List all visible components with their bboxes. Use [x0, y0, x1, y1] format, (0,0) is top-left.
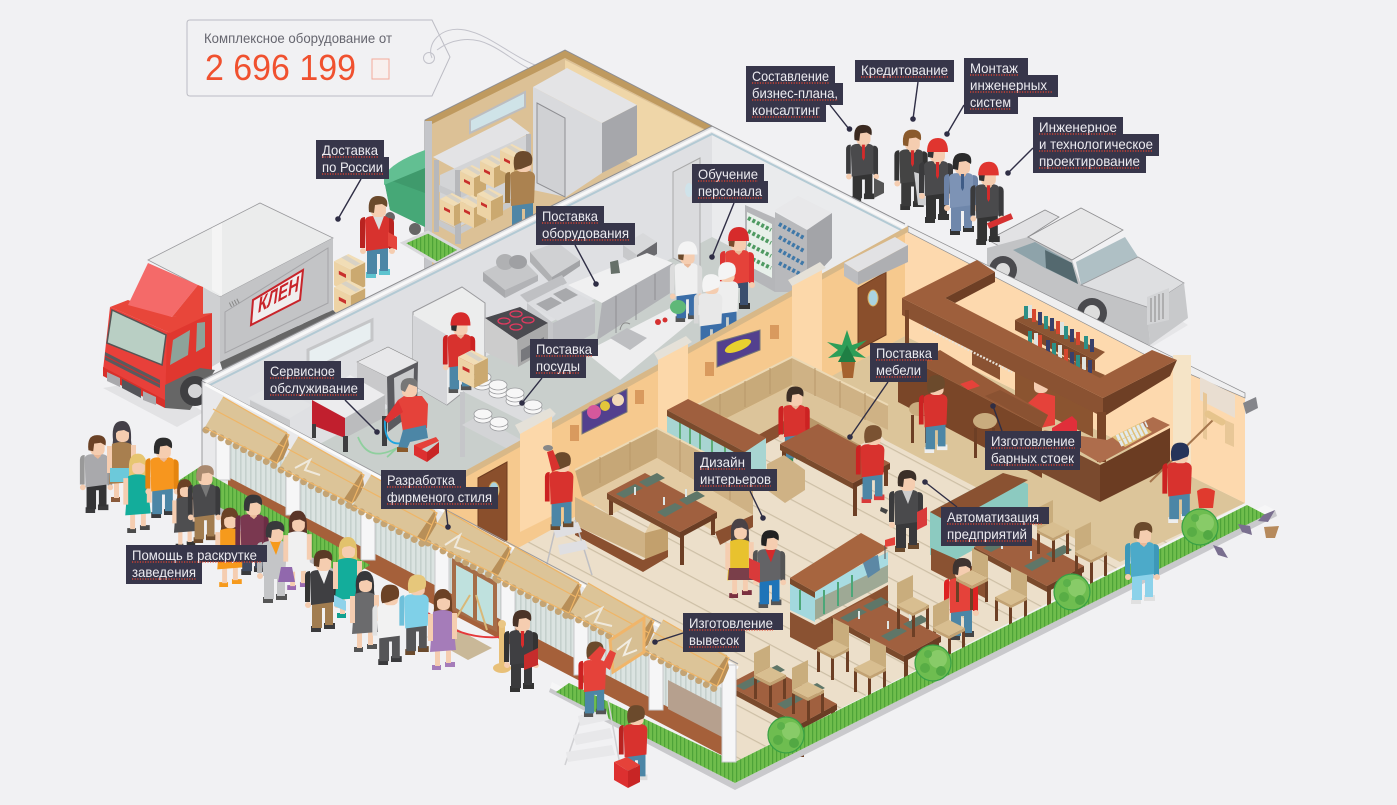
kitchen right wall	[712, 126, 905, 336]
label: Автоматизация предприятий	[922, 479, 1049, 546]
table front	[831, 597, 941, 689]
partition wall	[423, 228, 905, 600]
bar canopy	[902, 260, 1177, 462]
visitor 10	[283, 511, 312, 590]
sign board	[610, 618, 644, 672]
label: Обучение персонала	[692, 164, 768, 260]
hoses	[385, 420, 413, 443]
label: Монтаж инженерных систем: инженерных	[970, 77, 1047, 93]
blue suit man	[944, 150, 979, 235]
grass border front	[549, 505, 1277, 790]
door one	[478, 462, 507, 555]
label: Сервисное обслуживание: Сервисное	[270, 363, 335, 379]
truck shadow	[103, 380, 204, 427]
rat figurine	[610, 260, 620, 274]
kneeling repairman	[384, 378, 428, 452]
bar worker	[919, 375, 947, 453]
window	[308, 320, 372, 372]
consultant	[846, 122, 879, 202]
bushes	[768, 509, 1218, 753]
visitor 7	[215, 508, 244, 587]
salad	[670, 300, 686, 314]
label: Составление бизнес-плана, консалтинг	[746, 66, 852, 132]
label: Обучение персонала: персонала	[698, 183, 762, 199]
label: Сервисное обслуживание: обслуживание	[270, 380, 358, 396]
label: Автоматизация предприятий: Автоматизация	[947, 509, 1039, 525]
label: Инженерное и технологическое проектирование: Инженерное	[1039, 119, 1117, 135]
visitor 11	[305, 547, 340, 632]
visitor 12	[333, 537, 362, 618]
trainee chef two	[710, 262, 738, 340]
facade rim	[202, 381, 738, 664]
picture: car	[717, 330, 760, 367]
label: Монтаж инженерных систем: систем	[970, 94, 1011, 110]
interior window	[668, 680, 722, 737]
label: Поставка посуды: Поставка	[536, 341, 592, 357]
label: Кредитование	[855, 60, 954, 122]
passer-by	[1125, 519, 1160, 604]
lower sofa	[575, 428, 753, 572]
air conditioner	[844, 237, 908, 272]
label: Составление бизнес-плана, консалтинг: Составление	[752, 68, 829, 84]
label: Дизайн интерьеров	[694, 452, 777, 521]
label: Монтаж инженерных систем: Монтаж	[970, 60, 1019, 76]
designer couple	[725, 519, 786, 608]
label: Поставка оборудования: Поставка	[542, 208, 598, 224]
chair behind server	[933, 598, 965, 660]
woman in yellow	[725, 519, 754, 598]
hanging glasses	[925, 325, 1013, 370]
painter	[1162, 443, 1192, 523]
bucket	[1197, 488, 1215, 508]
dining hall	[420, 226, 1258, 762]
lamp installer on ladder	[543, 445, 592, 575]
delivery boxes	[334, 254, 365, 320]
bottle shelf and back bar	[972, 305, 1105, 437]
facade	[202, 381, 738, 762]
window	[470, 92, 525, 133]
tool box	[414, 437, 439, 462]
label: Изготовление вывесок	[652, 613, 783, 652]
label: Разработка фирменого стиля: фирменого стиля	[387, 489, 492, 505]
bar zone floor	[825, 336, 1245, 562]
chairs front	[817, 575, 929, 700]
manager with tablet	[880, 467, 927, 552]
car	[987, 208, 1188, 348]
menu folder	[524, 648, 538, 670]
entrance door	[452, 558, 497, 632]
label: Доставка по России: по России	[322, 159, 383, 175]
visitor 1	[80, 432, 113, 513]
visitor 4	[145, 435, 180, 518]
label: Доставка по России	[316, 140, 389, 222]
plan sheet	[914, 172, 936, 206]
long counter	[568, 253, 673, 303]
table right	[974, 527, 1084, 619]
visitor 9	[257, 518, 292, 603]
label: Изготовление барных стоек: Изготовление	[991, 433, 1075, 449]
trainee chef one	[670, 241, 703, 322]
crowd queue	[80, 421, 539, 692]
doorman	[504, 607, 539, 692]
hoods	[483, 255, 538, 290]
label: Поставка оборудования	[536, 206, 635, 287]
dumpster	[384, 150, 425, 235]
bartender	[1028, 375, 1055, 428]
label: Обучение персонала: Обучение	[698, 166, 758, 182]
specialists group	[846, 122, 1012, 245]
truck	[103, 203, 340, 427]
tag caption: Комплексное оборудование от	[204, 30, 393, 46]
visitor 3	[123, 454, 152, 533]
label: Составление бизнес-плана, консалтинг: консалтинг	[752, 102, 820, 118]
engineer two	[970, 162, 1005, 245]
visitor 14	[372, 585, 402, 665]
label: Разработка фирменого стиля: Разработка	[387, 472, 455, 488]
bar counter	[898, 350, 1048, 478]
mover table	[780, 424, 890, 516]
delivery man	[360, 193, 395, 278]
label: Помощь в раскрутке заведения	[126, 545, 267, 584]
kitchen back wall	[202, 126, 712, 506]
logo	[251, 270, 303, 325]
plant	[827, 330, 867, 378]
label: Помощь в раскрутке заведения: заведения	[132, 564, 196, 580]
aquarium partition	[667, 399, 766, 490]
stools	[909, 402, 997, 458]
plates shelf	[460, 378, 555, 430]
table one	[607, 473, 717, 565]
label: Изготовление барных стоек: барных стоек	[991, 450, 1075, 466]
tag loop	[424, 52, 434, 64]
rear wheels	[276, 323, 304, 351]
chairs bottom	[754, 645, 824, 722]
picture: fireworks	[582, 389, 627, 434]
kitchen	[202, 126, 905, 560]
shelving	[433, 118, 530, 170]
logo: КЛЕН	[258, 271, 299, 318]
storekeeper	[505, 151, 535, 233]
sink counter	[585, 298, 705, 380]
label: Инженерное и технологическое проектирование	[1005, 117, 1159, 176]
storage room	[425, 50, 712, 270]
server with chair	[944, 555, 979, 640]
man with scarf	[753, 527, 786, 608]
side table	[248, 385, 312, 418]
fryer panel	[520, 275, 567, 303]
chairs right	[995, 500, 1107, 629]
brown plinth	[228, 477, 735, 762]
label: Сервисное обслуживание	[264, 361, 380, 435]
label: Поставка посуды	[519, 339, 598, 406]
rolled drawing	[988, 216, 1012, 226]
grass tray	[403, 232, 460, 263]
label: Дизайн интерьеров: Дизайн	[700, 454, 745, 470]
price tag	[187, 20, 535, 96]
microwave	[623, 233, 657, 255]
stored boxes	[460, 165, 486, 198]
label: Изготовление вывесок: Изготовление	[689, 615, 773, 631]
label: Кредитование: Кредитование	[861, 62, 948, 78]
display windows	[225, 425, 735, 745]
visitor 2	[107, 421, 136, 502]
paint patch and roller	[1150, 377, 1235, 482]
wall lamps	[570, 325, 779, 441]
seated man behind table	[778, 384, 811, 462]
visitor 13	[350, 571, 379, 652]
sign installer	[565, 642, 620, 765]
cab	[103, 307, 170, 408]
left grass strip	[172, 468, 370, 584]
flag	[884, 545, 886, 559]
rope	[428, 613, 500, 637]
fridge two	[775, 196, 832, 230]
rim	[908, 226, 1245, 398]
engineer one	[919, 138, 954, 223]
mat	[427, 625, 492, 660]
table bottom	[727, 665, 837, 757]
columns	[216, 425, 736, 762]
head chef	[720, 227, 755, 312]
tag string	[431, 29, 535, 68]
right aquarium	[930, 473, 1028, 598]
hall floor	[420, 336, 1245, 762]
red oven	[312, 375, 385, 418]
visitor 15	[399, 575, 429, 655]
stove	[485, 307, 548, 340]
label: Помощь в раскрутке заведения: Помощь в раскрутке	[132, 547, 257, 563]
door opening	[413, 287, 485, 405]
back wall	[905, 228, 1245, 503]
partition top trim	[425, 226, 908, 498]
label: Поставка мебели: мебели	[876, 362, 921, 378]
price: 2 696 199	[205, 47, 356, 88]
tool box on bar	[1052, 416, 1077, 442]
label: Изготовление барных стоек	[985, 403, 1081, 470]
label: Поставка посуды: посуды	[536, 358, 580, 374]
bar cabinet end	[1020, 417, 1170, 502]
label: Составление бизнес-плана, консалтинг: бизнес-плана,	[752, 85, 838, 101]
cargo box	[148, 203, 333, 297]
upper sofa	[697, 357, 888, 455]
awnings	[205, 397, 729, 689]
label: Поставка мебели	[847, 343, 938, 440]
tall combi oven	[357, 347, 418, 377]
label: Доставка по России: Доставка	[322, 142, 378, 158]
red folder	[749, 558, 760, 583]
pilasters	[520, 268, 822, 532]
briefcase	[874, 178, 884, 198]
kitchen floor	[202, 237, 905, 560]
fridge one	[745, 205, 775, 292]
finance man	[894, 127, 929, 210]
label: Поставка мебели: Поставка	[876, 345, 932, 361]
door two	[858, 272, 886, 350]
far door	[673, 158, 700, 272]
table mover	[856, 425, 884, 503]
front aquarium	[790, 533, 895, 650]
label: Изготовление вывесок: вывесок	[689, 632, 740, 648]
post	[493, 620, 511, 673]
label: Разработка фирменого стиля	[381, 470, 498, 530]
fryers	[527, 285, 595, 322]
red folder	[388, 232, 397, 250]
visitor 6	[188, 462, 221, 543]
cold room	[533, 87, 602, 197]
birds	[1213, 510, 1279, 558]
label: Поставка оборудования: оборудования	[542, 225, 629, 241]
security camera	[1243, 397, 1258, 414]
label: Инженерное и технологическое проектирование: проектирование	[1039, 153, 1140, 169]
visitor 16	[428, 589, 457, 670]
visitor 5	[172, 479, 197, 548]
sofa end	[767, 455, 805, 503]
label: Автоматизация предприятий: предприятий	[947, 526, 1027, 542]
label: Монтаж инженерных систем	[944, 58, 1058, 137]
glasses on tray	[1112, 423, 1152, 447]
trainee chef three	[694, 274, 722, 352]
waiter carrying box	[443, 312, 476, 393]
label: Инженерное и технологическое проектирование: и технологическое	[1039, 136, 1153, 152]
visitor 8	[235, 492, 270, 575]
missing currency glyph	[372, 59, 389, 79]
technician with tool box	[614, 705, 647, 788]
label: Дизайн интерьеров: интерьеров	[700, 471, 771, 487]
